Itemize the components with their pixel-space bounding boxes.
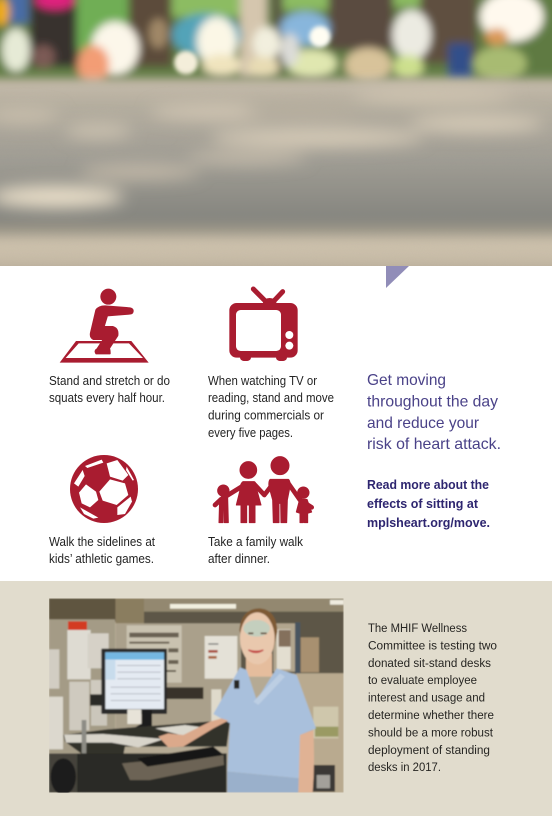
callout: get moving message: and reduce your [367,415,480,432]
text: TV tip: When watching TV or [208,374,318,388]
panel: wellness committee [0,581,552,816]
text: TV tip: reading, stand and move [208,391,334,405]
text: family walk tip: after dinner. [208,552,270,566]
link text: read more: mplsheart.org/move. [367,515,490,530]
road base [0,78,552,285]
text: committee description: interest and usage and [368,691,485,705]
link text: read more: Read more about the [367,477,489,492]
photo: woman at standing desk [49,598,344,795]
woman [239,608,277,650]
text: committee description: desks in 2017. [368,760,441,774]
text: TV tip [208,374,334,440]
text: committee description: deployment of standing [368,743,490,757]
text: sidelines tip [49,535,155,566]
text: committee description: The MHIF Wellness [368,621,467,635]
text: committee description: to evaluate employee [368,673,477,687]
text: committee description: determine whether there [368,708,494,722]
monitor [101,649,167,714]
callout: get moving message: risk of heart attack. [367,436,501,453]
text: TV tip: every five pages. [208,426,293,440]
papers [68,621,87,630]
text: TV tip: during commercials or [208,408,325,422]
icon: soccer ball [70,455,138,523]
icon: person doing squat on mat [60,289,149,363]
link text: read more [367,477,490,530]
text: squats tip [49,374,170,405]
text: squats tip: squats every half hour. [49,391,165,405]
panel: sitting tips [49,289,334,566]
text: family walk tip [208,535,304,566]
corner triangle accent [386,266,409,288]
icon: family holding hands [215,457,312,523]
text: committee description [368,621,497,774]
text: sidelines tip: kids’ athletic games. [49,552,154,566]
text: squats tip: Stand and stretch or do [49,374,170,388]
hero photo: blurred park path [0,0,552,285]
callout: get moving message: Get moving [367,372,446,389]
text: family walk tip: Take a family walk [208,535,304,549]
text: committee description: donated sit-stand desks [368,656,491,670]
text: committee description: Committee is testing two [368,638,497,652]
icon: television [229,289,298,361]
text: sidelines tip: Walk the sidelines at [49,535,155,549]
callout: get moving message [367,372,501,453]
desk [63,722,230,755]
link text: read more: effects of sitting at [367,496,479,511]
callout: get moving message: throughout the day [367,394,498,410]
text: committee description: should be a more robust [368,725,494,739]
